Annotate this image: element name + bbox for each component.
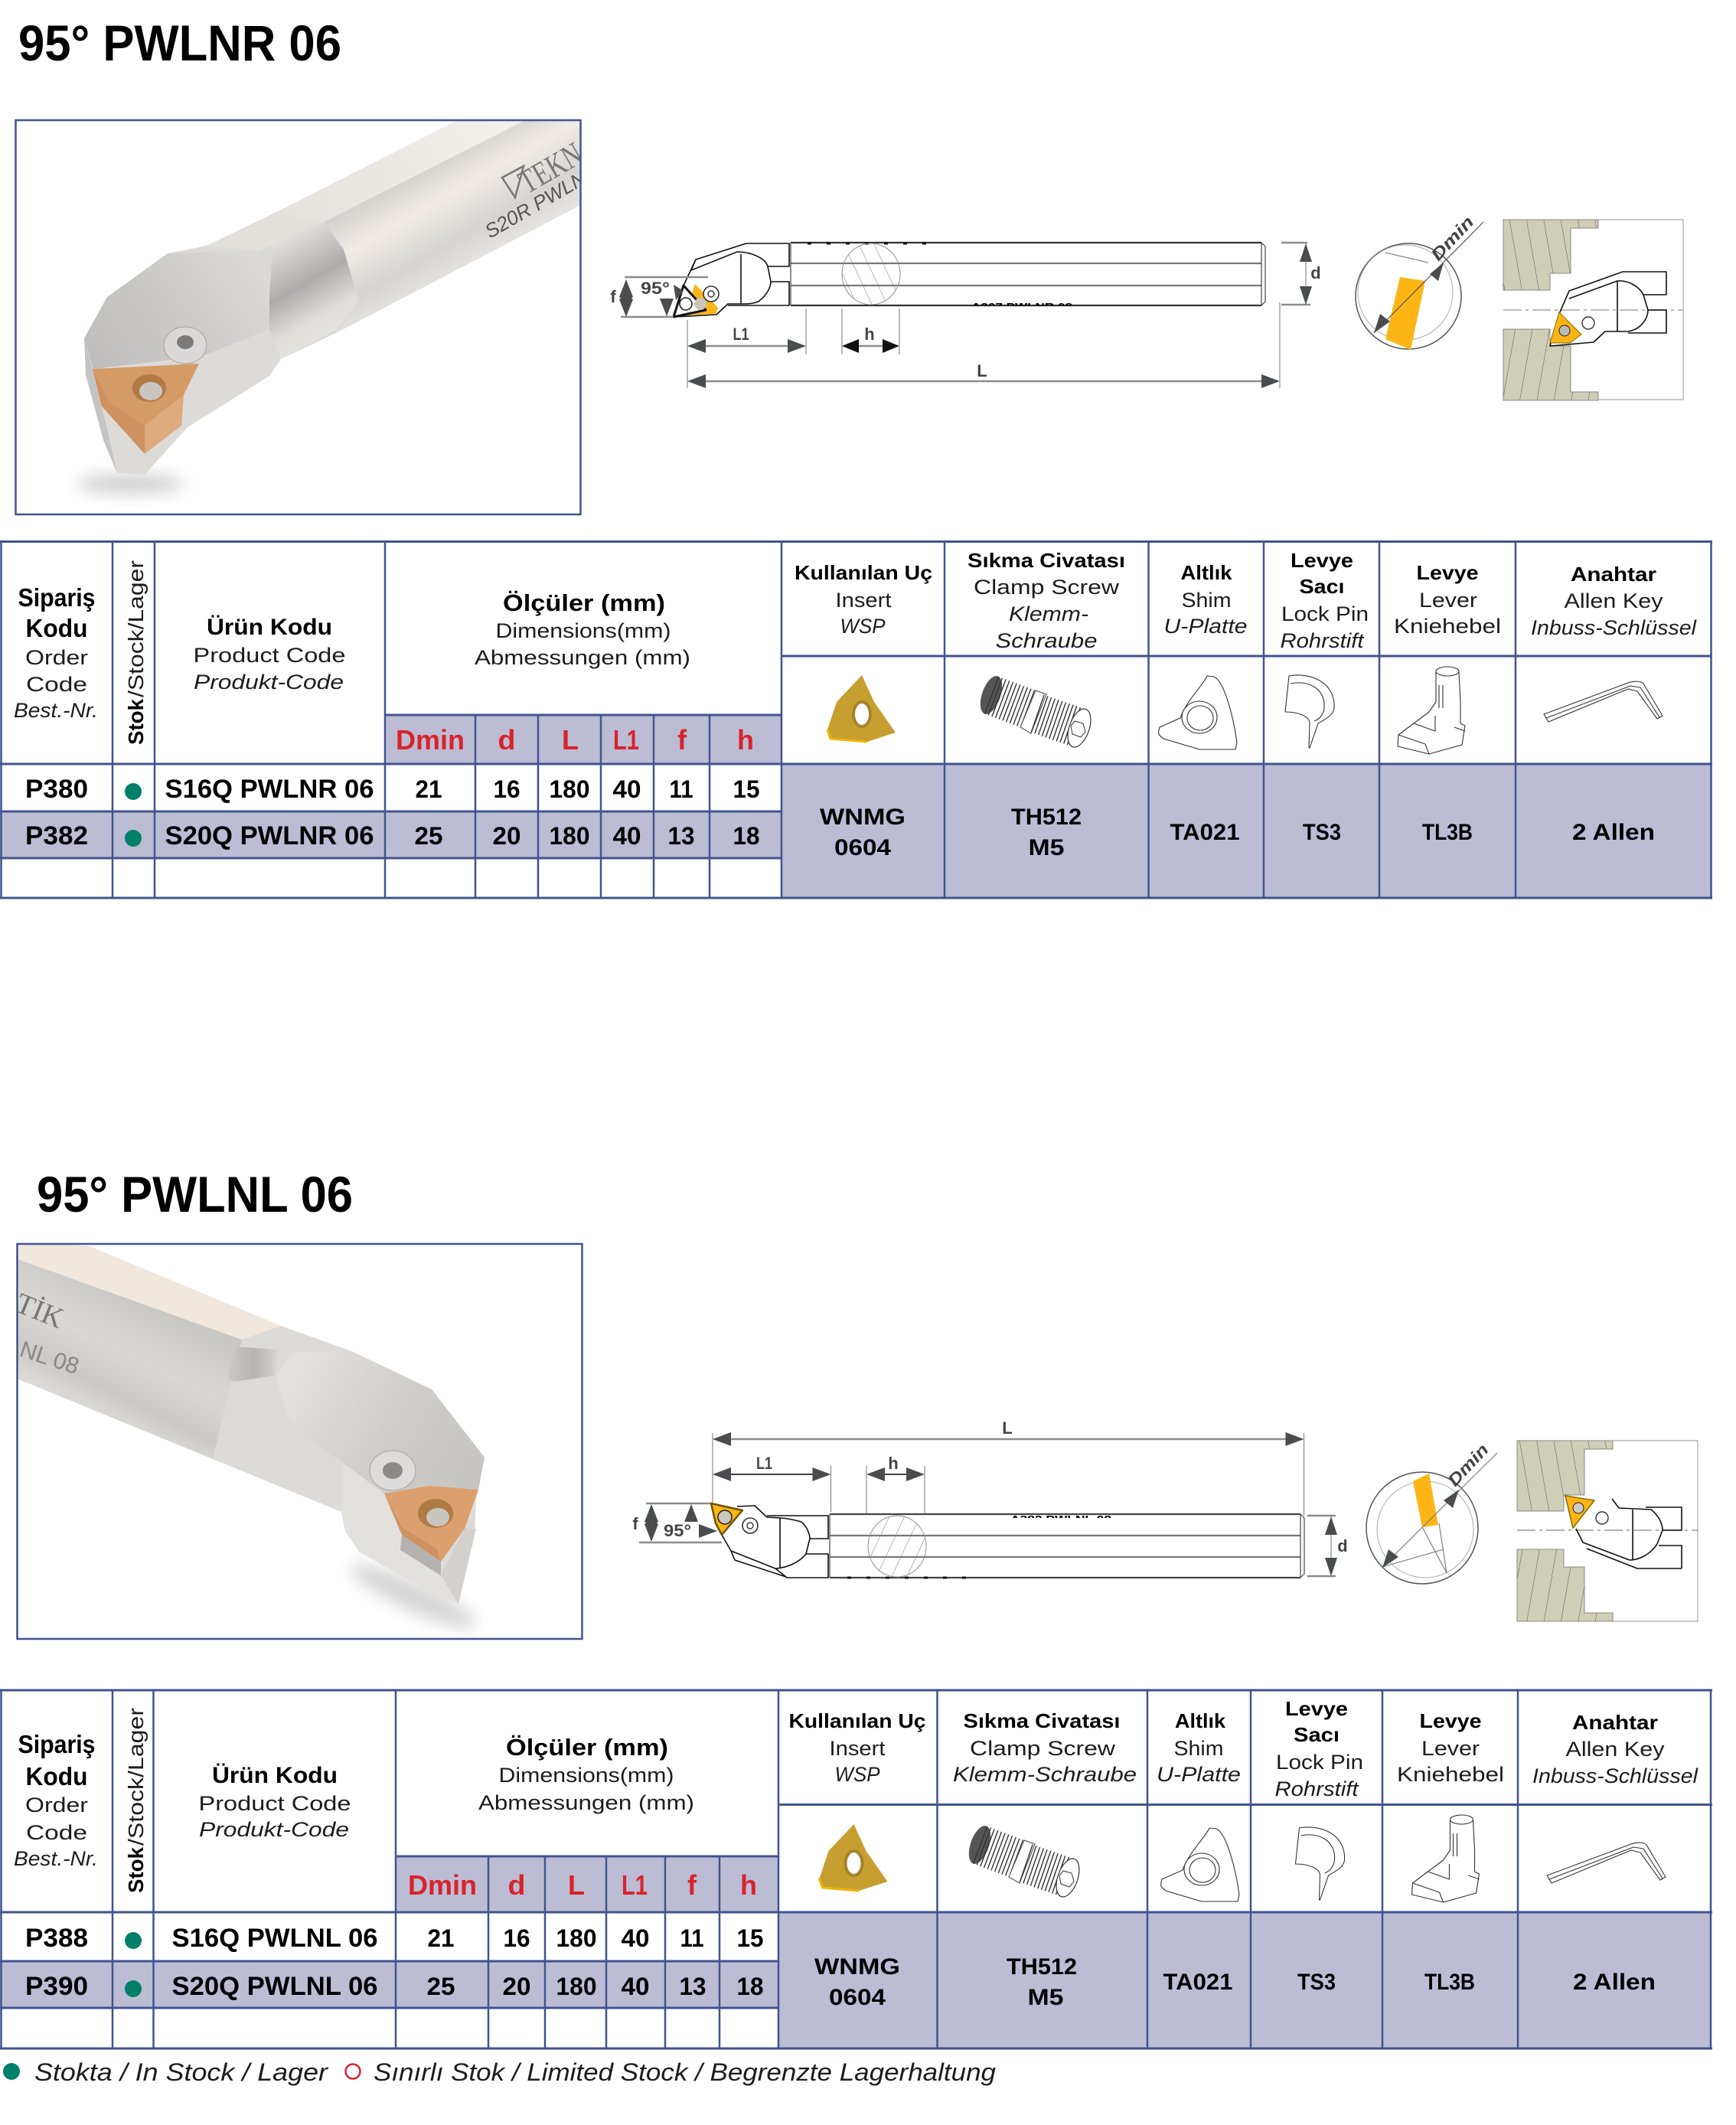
tool outline xyxy=(722,1506,1304,1578)
header: clamp screw: Klemm- xyxy=(1009,602,1088,625)
header: product code: Product Code xyxy=(199,1792,351,1815)
header: insert: Insert xyxy=(830,1737,886,1760)
row: P380: S16Q PWLNR 06 xyxy=(165,775,374,804)
header: clamp screw: Sıkma Civatası xyxy=(963,1709,1121,1732)
schematic: circular detail Dmin xyxy=(1356,212,1483,350)
data: insert codes: TS3 xyxy=(1303,820,1341,845)
tool outline: A382 PWLNL 08 xyxy=(1010,1513,1111,1525)
header: allen key: Allen Key xyxy=(1565,589,1663,612)
section hatch h xyxy=(842,243,900,305)
header: shim: Shim xyxy=(1174,1737,1223,1760)
clamp screw xyxy=(370,1451,416,1490)
engraved text: NL 08 xyxy=(17,1337,82,1379)
engraved text: S20R PWLN xyxy=(481,166,590,243)
engraved logo xyxy=(502,166,524,197)
dimension d xyxy=(1281,243,1321,305)
header: dimensions: Dimensions(mm) xyxy=(499,1764,674,1787)
row: P380: 40 xyxy=(612,775,641,803)
engraved text: TEKN xyxy=(512,135,589,201)
header: product code: Ürün Kodu xyxy=(207,615,332,640)
data: insert codes: TS3 xyxy=(1297,1970,1336,1995)
header: allen key: Anahtar xyxy=(1571,563,1656,586)
header: shim xyxy=(1157,1709,1241,1786)
schematic: circular detail Dmin left-hand xyxy=(1366,1440,1497,1584)
row: P380 xyxy=(25,775,759,804)
table: PWLNL 06 specifications xyxy=(0,1690,1712,2048)
row: P390: 18 xyxy=(736,1973,764,2000)
header: order code: Sipariş xyxy=(18,583,95,612)
icon: gold insert xyxy=(819,1824,888,1891)
icon: lock pin xyxy=(1285,675,1334,748)
header: product code xyxy=(193,615,346,694)
shaded cells xyxy=(0,715,1712,898)
header: lever xyxy=(1397,1709,1504,1786)
header: dimension symbols: d xyxy=(498,724,516,756)
row: P382: P382 xyxy=(25,821,88,850)
row: P382: 18 xyxy=(733,822,759,850)
icon: shim xyxy=(1161,1828,1239,1901)
row: P390: 180 xyxy=(556,1973,597,2000)
row: P388: 21 xyxy=(427,1924,455,1952)
schematic: bore section view left-hand xyxy=(1517,1441,1698,1621)
header: shim: Shim xyxy=(1182,589,1231,612)
row: P388: 15 xyxy=(736,1924,764,1952)
data: insert codes xyxy=(814,1954,1656,2010)
header: insert: Kullanılan Uç xyxy=(795,561,932,584)
orange insert xyxy=(93,364,199,454)
header: order code xyxy=(14,1730,98,1870)
row: P380: 16 xyxy=(493,775,520,803)
header: product code: Product Code xyxy=(193,644,346,667)
dimension L xyxy=(687,302,1280,388)
icon: clamp screw xyxy=(976,674,1095,750)
header: dimensions: Dimensions(mm) xyxy=(496,619,671,642)
header: stock rotated xyxy=(124,1708,148,1893)
header: allen key: Anahtar xyxy=(1572,1711,1658,1734)
header: lock pin: Levye xyxy=(1285,1697,1348,1720)
data: insert codes: TA021 xyxy=(1163,1970,1232,1995)
tool shank and head xyxy=(84,115,589,475)
header: lock pin: Rohrstift xyxy=(1275,1777,1359,1800)
dimension L: L xyxy=(977,361,987,380)
data: insert codes: TH512 xyxy=(1011,805,1082,830)
engraved text xyxy=(18,1293,78,1373)
row: P388: 180 xyxy=(556,1924,597,1952)
insert xyxy=(674,284,719,317)
row: P382: S20Q PWLNR 06 xyxy=(165,821,374,850)
dimension d: d xyxy=(1337,1536,1348,1555)
row: P390: 13 xyxy=(680,1973,706,2000)
dimension f and 95 degrees: f xyxy=(610,287,616,306)
orange insert xyxy=(384,1486,478,1562)
row: P390: 40 xyxy=(622,1973,649,2000)
data: insert codes: 2 Allen xyxy=(1573,1970,1656,1995)
icon: shim xyxy=(1159,676,1237,749)
data: insert codes: TL3B xyxy=(1424,1970,1475,1995)
header: allen key xyxy=(1532,1711,1698,1787)
data: insert codes: TH512 xyxy=(1007,1954,1077,1980)
icon: lock pin xyxy=(1295,1827,1345,1900)
shaded cells xyxy=(0,1856,1711,2048)
header: stock rotated: /Stock/Lager xyxy=(124,560,148,697)
dimension h: h xyxy=(888,1454,899,1473)
dimension L: L xyxy=(1002,1418,1013,1438)
data: insert codes: M5 xyxy=(1029,835,1064,860)
row: P390 xyxy=(25,1972,764,2001)
header: dimension symbols: h xyxy=(737,724,754,756)
row: P388: P388 xyxy=(25,1924,88,1953)
title: 95° PWLNR 06: 95° PWLNR 06 xyxy=(18,15,341,71)
dimension f and 95 degrees: f xyxy=(632,1514,638,1533)
data: insert codes: 0604 xyxy=(834,835,891,860)
grid lines xyxy=(0,1690,1712,2048)
header: shim: Altlık xyxy=(1180,561,1232,584)
row: P380: 11 xyxy=(669,775,693,803)
header: insert xyxy=(788,1709,926,1786)
header: dimensions xyxy=(475,589,690,669)
header: dimension symbols: L1 xyxy=(613,724,639,756)
row: P382 xyxy=(25,821,759,850)
schematic: bore section view xyxy=(1503,220,1683,400)
header: lever: Levye xyxy=(1419,1709,1482,1732)
header: shim xyxy=(1163,561,1248,638)
row: P388: 16 xyxy=(504,1924,530,1952)
header: order code: Kodu xyxy=(26,614,87,642)
header: dimensions: Ölçüler (mm) xyxy=(506,1734,668,1761)
row: P390: 20 xyxy=(502,1973,531,2000)
row: P380: P380 xyxy=(25,775,88,804)
schematic: circular detail Dmin: Dmin xyxy=(1427,212,1477,264)
header: insert: WSP xyxy=(840,615,885,638)
schematic: tool side view PWLNR xyxy=(610,243,1321,388)
dimension h: h xyxy=(864,325,875,344)
schematic: circular detail Dmin left-hand: Dmin xyxy=(1444,1440,1493,1490)
header: dimensions xyxy=(478,1734,694,1814)
header: product code: Produkt-Code xyxy=(194,671,344,694)
header: dimension symbols: Dmin xyxy=(408,1869,477,1901)
dimension L1: L1 xyxy=(733,325,749,344)
header: dimension symbols: f xyxy=(677,724,687,756)
header: lever: Lever xyxy=(1419,589,1477,612)
header: lever: Kniehebel xyxy=(1394,615,1501,638)
data: insert codes: TA021 xyxy=(1170,820,1240,845)
header: clamp screw: Sıkma Civatası xyxy=(968,549,1125,572)
data: insert codes: WNMG xyxy=(814,1954,900,1980)
header: dimension symbols: L xyxy=(562,724,579,756)
data: insert codes: M5 xyxy=(1027,1985,1064,2010)
header: allen key xyxy=(1531,563,1697,639)
panel: product photo PWLNL xyxy=(11,1240,582,1639)
schematic: tool side view PWLNL xyxy=(632,1418,1348,1578)
header: dimension symbols: h xyxy=(740,1869,757,1901)
engraved text xyxy=(487,142,580,237)
header: lock pin: Rohrstift xyxy=(1280,629,1365,652)
header: dimension symbols xyxy=(396,724,754,756)
row: P388: 11 xyxy=(680,1924,704,1952)
icon: allen key xyxy=(1547,1843,1666,1883)
header: order code: Code xyxy=(26,1821,87,1844)
data: insert codes: 0604 xyxy=(829,1985,886,2010)
header: clamp screw: Schraube xyxy=(995,629,1098,652)
header: order code: Sipariş xyxy=(18,1730,95,1758)
dimension d: d xyxy=(1310,263,1321,282)
header: dimension symbols: Dmin xyxy=(396,724,465,756)
row: P388 xyxy=(25,1924,764,1953)
header: clamp screw: Clamp Screw xyxy=(970,1737,1116,1760)
dimension d xyxy=(1307,1516,1348,1576)
dimension f and 95 degrees xyxy=(632,1503,722,1542)
row: P382: 25 xyxy=(415,822,442,850)
row: P388: S16Q PWLNL 06 xyxy=(171,1924,378,1953)
header: dimension symbols: d xyxy=(508,1869,525,1901)
engraved text: TİK xyxy=(11,1287,69,1335)
header: insert xyxy=(795,561,932,638)
icon: lever xyxy=(1398,667,1465,754)
row: P380: 21 xyxy=(415,775,442,803)
header: lock pin xyxy=(1280,549,1369,652)
row: P380: 15 xyxy=(733,775,759,803)
header: lever: Levye xyxy=(1416,561,1479,584)
header: dimension symbols: L xyxy=(568,1869,585,1901)
header: lever: Lever xyxy=(1421,1737,1480,1760)
table: PWLNR 06 specifications xyxy=(0,541,1712,898)
row: P390: S20Q PWLNL 06 xyxy=(171,1972,378,2001)
header: shim: U-Platte xyxy=(1157,1763,1241,1786)
header: clamp screw xyxy=(968,549,1125,652)
header: insert: Kullanılan Uç xyxy=(788,1709,926,1732)
icon: gold insert xyxy=(827,675,896,742)
header: dimension symbols: f xyxy=(687,1869,697,1901)
row: P390: 25 xyxy=(427,1973,455,2000)
header: lock pin: Lock Pin xyxy=(1281,602,1369,625)
header: shim: U-Platte xyxy=(1163,615,1248,638)
grid lines xyxy=(0,541,1712,898)
tool shadow xyxy=(348,1559,478,1634)
data: insert codes: 2 Allen xyxy=(1572,820,1655,845)
header: clamp screw xyxy=(953,1709,1137,1786)
header: dimensions: Abmessungen (mm) xyxy=(475,646,690,669)
tool outline xyxy=(674,243,1265,317)
header: insert: WSP xyxy=(834,1763,880,1786)
header: insert: Insert xyxy=(836,589,892,612)
header: stock rotated xyxy=(124,560,148,745)
header: stock rotated: /Stock/Lager xyxy=(124,1708,148,1846)
icon: lever xyxy=(1411,1815,1479,1902)
dimension h xyxy=(842,308,899,354)
row: P390: P390 xyxy=(25,1972,88,2001)
dimension f and 95 degrees: 95° xyxy=(664,1521,691,1540)
header: order code: Kodu xyxy=(26,1762,87,1790)
header: lever xyxy=(1394,561,1501,638)
header: allen key: Inbuss-Schlüssel xyxy=(1532,1764,1698,1787)
tool outline: A307 PWLNR 08 xyxy=(971,301,1072,312)
data: insert codes: TL3B xyxy=(1422,820,1473,845)
header: lock pin: Sacı xyxy=(1300,575,1344,598)
legend: stock status xyxy=(3,2058,996,2086)
row: P380: 180 xyxy=(550,775,589,803)
header: product code: Ürün Kodu xyxy=(212,1763,338,1788)
dimension L xyxy=(713,1418,1304,1516)
row: P382: 180 xyxy=(550,822,589,850)
header: stock rotated: Stok xyxy=(124,1847,148,1893)
header: clamp screw: Klemm-Schraube xyxy=(953,1763,1137,1786)
dimension L1: L1 xyxy=(756,1454,772,1473)
dimension L1 xyxy=(687,308,806,388)
header: dimension symbols: L1 xyxy=(622,1869,648,1901)
header: lever: Kniehebel xyxy=(1397,1763,1504,1786)
row: P382: 20 xyxy=(493,822,520,850)
header: lock pin: Levye xyxy=(1291,549,1353,572)
header: lock pin: Sacı xyxy=(1294,1723,1340,1746)
header: order code: Best.-Nr. xyxy=(14,699,98,722)
header: dimensions: Ölçüler (mm) xyxy=(503,589,665,616)
header: dimension symbols xyxy=(408,1869,757,1901)
legend: stock status: Stokta / In Stock / Lager xyxy=(34,2058,329,2086)
dimension h xyxy=(866,1454,925,1513)
header: allen key: Allen Key xyxy=(1566,1738,1665,1761)
row: P382: 40 xyxy=(612,822,641,850)
header: lock pin: Lock Pin xyxy=(1276,1751,1363,1774)
dimension f and 95 degrees: 95° xyxy=(641,279,670,298)
header: allen key: Inbuss-Schlüssel xyxy=(1531,616,1697,639)
header: dimensions: Abmessungen (mm) xyxy=(478,1791,694,1814)
header: order code: Best.-Nr. xyxy=(14,1847,98,1870)
tool body xyxy=(11,1240,485,1604)
header: stock rotated: Stok xyxy=(124,699,148,745)
header: lock pin xyxy=(1275,1697,1363,1800)
header: order code xyxy=(14,583,98,722)
data: insert codes xyxy=(820,805,1655,860)
header: clamp screw: Clamp Screw xyxy=(974,576,1120,599)
header: order code: Order xyxy=(25,646,88,669)
section hatch h xyxy=(868,1516,926,1577)
icon: allen key xyxy=(1544,681,1663,722)
header: product code: Produkt-Code xyxy=(199,1818,349,1841)
header: order code: Code xyxy=(26,673,87,696)
title: 95° PWLNL 06: 95° PWLNL 06 xyxy=(37,1166,353,1222)
header: order code: Order xyxy=(25,1794,88,1817)
dimension f and 95 degrees xyxy=(610,277,708,317)
insert xyxy=(711,1503,758,1535)
clamp screw xyxy=(164,327,207,364)
row: P382: 13 xyxy=(667,822,695,850)
row: P388: 40 xyxy=(622,1924,649,1952)
dimension L1 xyxy=(713,1454,831,1512)
panel: product photo PWLNR xyxy=(15,115,598,514)
data: insert codes: WNMG xyxy=(820,805,906,830)
header: shim: Altlık xyxy=(1175,1709,1226,1732)
legend: stock status: Sınırlı Stok / Limited Stock / Begrenzte Lagerhaltung xyxy=(374,2058,996,2086)
header: product code xyxy=(199,1763,351,1841)
tool shadow xyxy=(77,473,184,495)
icon: clamp screw xyxy=(964,1823,1084,1900)
